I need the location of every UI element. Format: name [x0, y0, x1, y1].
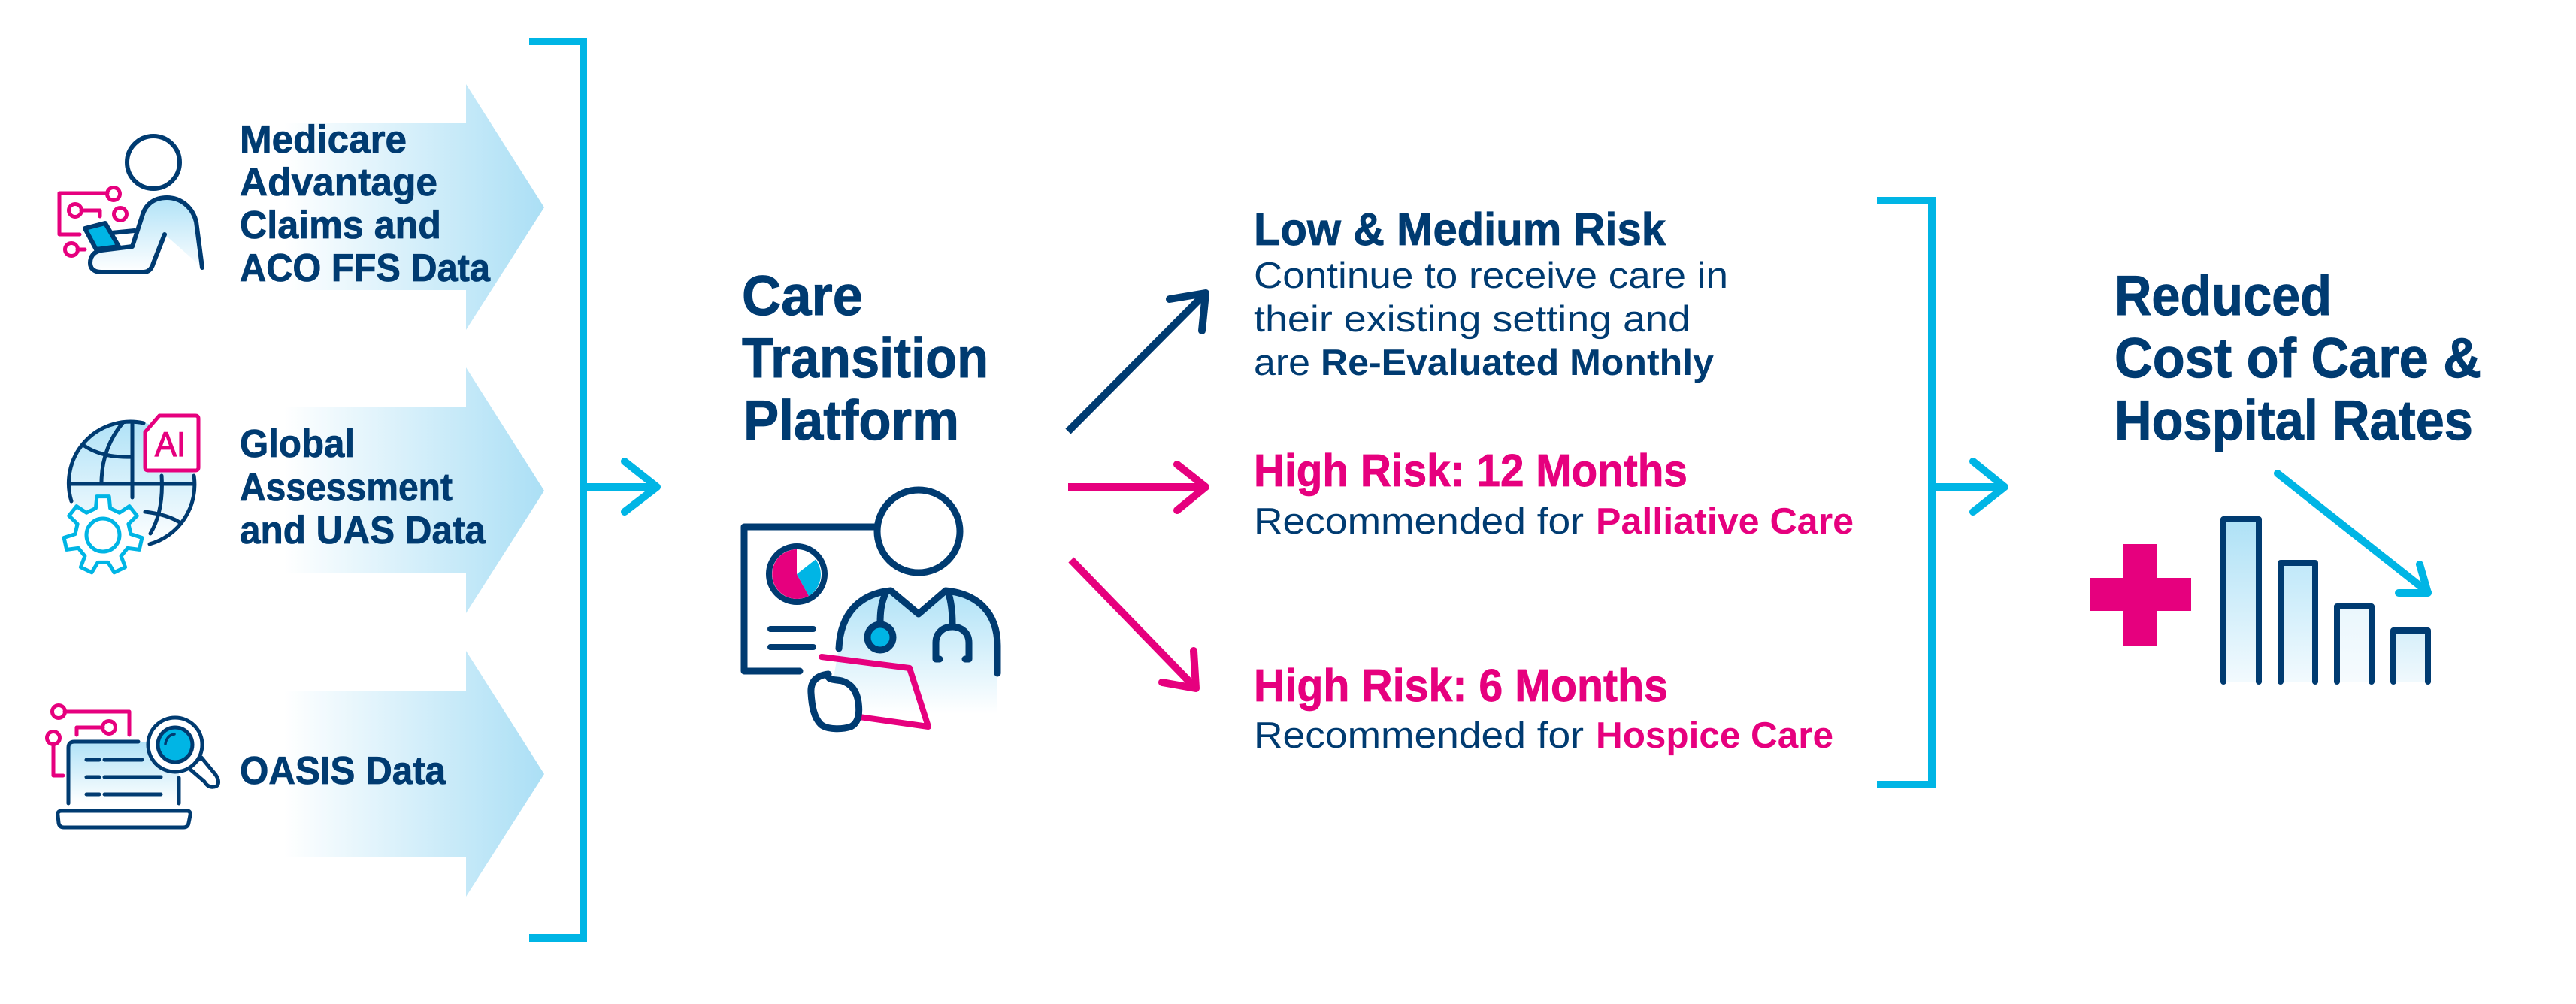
heading: High Risk 12 Months: High Risk: 12 Months [1254, 445, 1688, 496]
heading: Care Transition Platform: Platform [743, 389, 959, 452]
text: Global Assessment and UAS Data: and UAS Data [240, 509, 486, 552]
icon: person with tablet and circuits [59, 136, 202, 272]
heading: Care Transition Platform: Transition [742, 326, 988, 389]
icon: doctor with chart and tablet [744, 490, 997, 729]
text: recommended for palliative care: Recommended for [1254, 501, 1584, 542]
heading: High Risk 6 Months: High Risk: 6 Months [1254, 660, 1668, 711]
bracket: inputs [529, 41, 583, 938]
block arrow: Medicare data [240, 84, 544, 330]
text: Global Assessment and UAS Data [240, 422, 486, 552]
heading: Reduced Cost of Care & Hospital Rates: Cost of Care & [2114, 326, 2481, 389]
text: Medicare Advantage Claims and ACO FFS Data: Advantage [240, 161, 437, 204]
icon: globe with AI tag and gear [64, 416, 198, 573]
heading: Care Transition Platform: Care [742, 264, 863, 327]
icon: laptop with magnifier and circuits [47, 705, 219, 827]
heading: Care Transition Platform [742, 264, 988, 452]
heading: Low & Medium Risk: Low & Medium Risk [1254, 204, 1666, 255]
arrow: to high risk 6 months [1071, 560, 1196, 688]
text: recommended for palliative care: Palliative Care [1596, 501, 1854, 542]
panel: Care Transition Platform [742, 264, 997, 729]
heading: Reduced Cost of Care & Hospital Rates: Reduced [2114, 264, 2332, 327]
text: continue to receive care: their existing setting and [1254, 299, 1691, 340]
text: Global Assessment and UAS Data: Assessment [240, 466, 453, 510]
block arrow: OASIS data [240, 651, 544, 897]
block arrow: Global Assessment data [240, 367, 544, 613]
text: continue to receive care: Re-Evaluated Monthly [1321, 343, 1714, 383]
text: Medicare Advantage Claims and ACO FFS Data: ACO FFS Data [240, 246, 491, 290]
text: Medicare Advantage Claims and ACO FFS Data: Claims and [240, 204, 441, 247]
text: continue to receive care: Continue to receive care in [1254, 256, 1728, 296]
arrow: inputs to platform [585, 461, 657, 512]
arrow: downward trend [2278, 473, 2428, 593]
arrow: outcomes to result [1933, 461, 2005, 512]
panel: result [2090, 264, 2481, 682]
heading: Reduced Cost of Care & Hospital Rates [2114, 264, 2481, 452]
icon: globe with AI tag and gear: AI [155, 425, 186, 464]
text: continue to receive care [1254, 256, 1728, 383]
text: Medicare Advantage Claims and ACO FFS Data [240, 118, 491, 290]
text: recommended for hospice care: Recommended for [1254, 715, 1584, 756]
bar chart: falling costs [2223, 519, 2428, 682]
bracket: outcomes [1877, 201, 1932, 785]
panel: high risk 12 months [1254, 445, 1854, 542]
text: OASIS Data: OASIS Data [240, 749, 446, 793]
panel: high risk 6 months [1254, 660, 1833, 756]
text: Medicare Advantage Claims and ACO FFS Data: Medicare [240, 118, 407, 162]
panel: data sources [47, 84, 544, 897]
heading: Reduced Cost of Care & Hospital Rates: Hospital Rates [2114, 389, 2473, 452]
arrow: to low and medium risk [1068, 293, 1206, 431]
text: recommended for palliative care [1254, 501, 1854, 542]
text: Global Assessment and UAS Data: Global [240, 422, 355, 466]
pie chart [769, 546, 825, 602]
text: continue to receive care: are [1254, 343, 1310, 383]
text: recommended for hospice care: Hospice Care [1596, 715, 1833, 756]
icon: medical cross [2090, 544, 2191, 646]
panel: low and medium risk [1254, 204, 1728, 383]
text: recommended for hospice care [1254, 715, 1833, 756]
arrow: to high risk 12 months [1068, 464, 1206, 510]
